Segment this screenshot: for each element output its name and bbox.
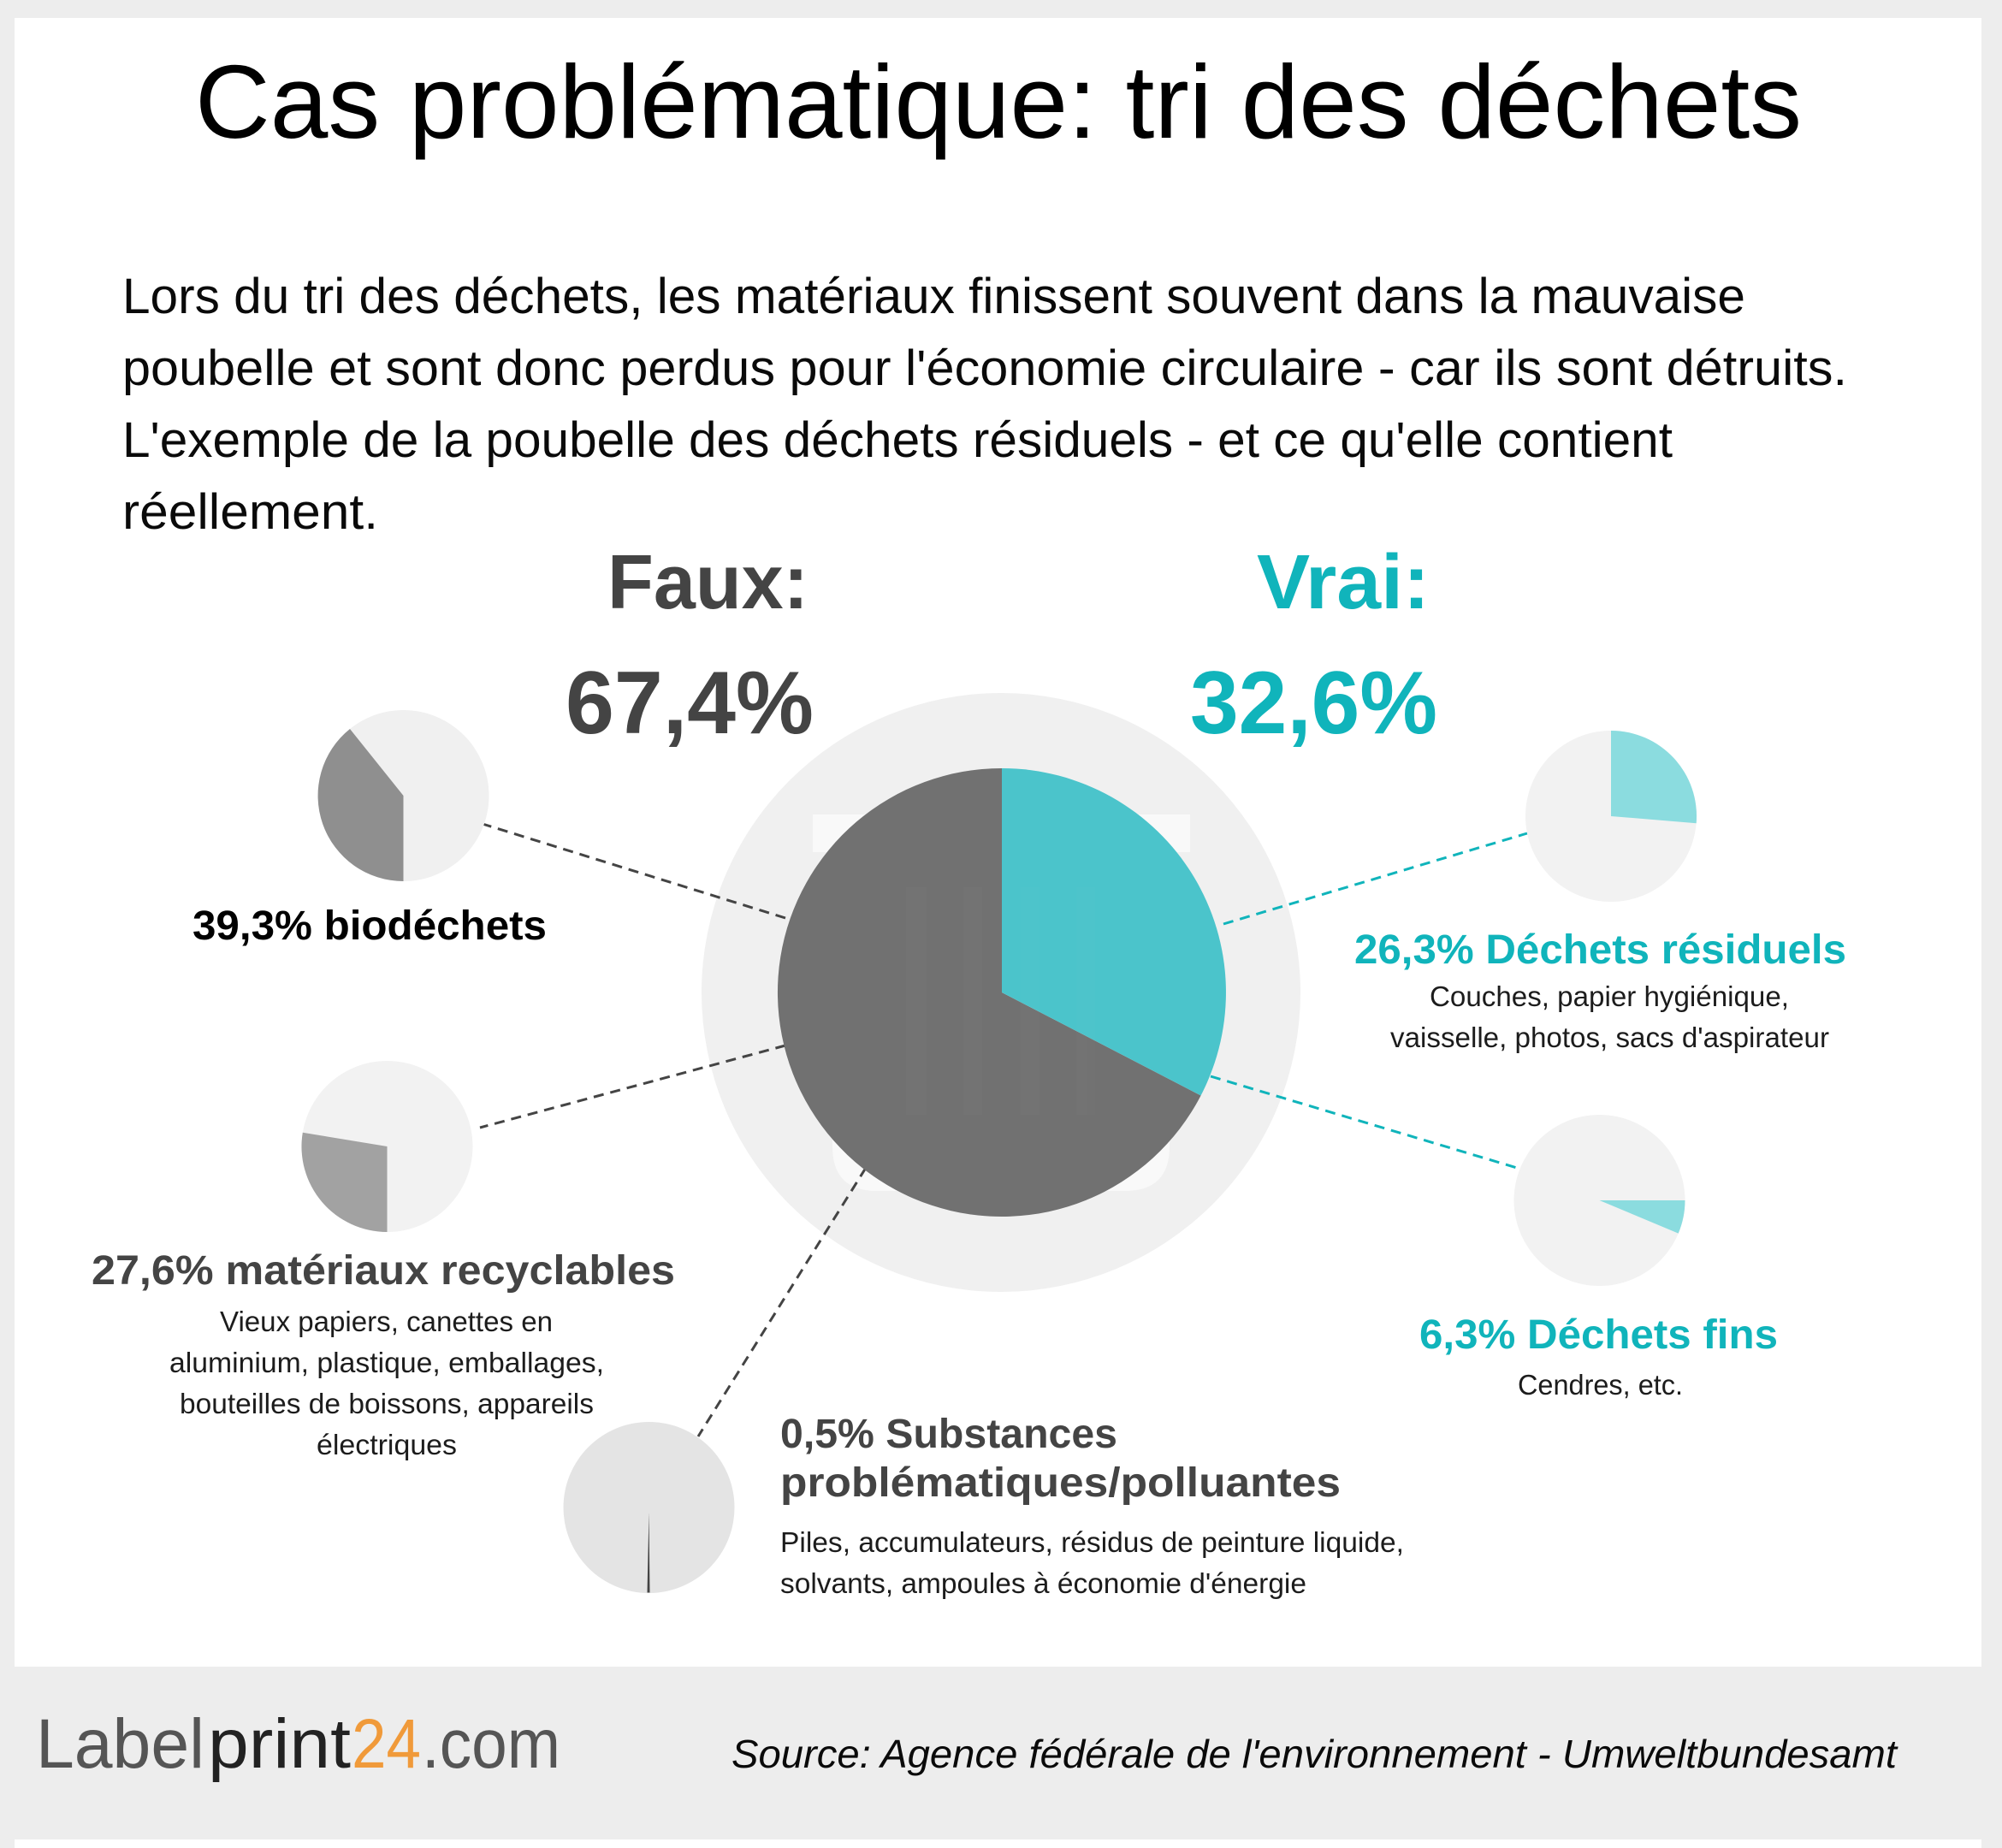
heading: Vrai: Vrai: [1257, 540, 1430, 625]
text: matériaux recyclables details: aluminium, plastique, emballages, [169, 1347, 604, 1378]
label: substances problématiques [780, 1412, 1341, 1506]
text: déchets résiduels details [1390, 980, 1829, 1053]
pie: déchets fins [1514, 1115, 1685, 1286]
figure: 32,6%: 32,6% [1190, 654, 1437, 753]
label: déchets résiduels: 26,3% Déchets résiduels [1354, 927, 1846, 973]
chart: central waste bin pie with halo [480, 693, 1527, 1436]
text: matériaux recyclables details: électriques [317, 1429, 457, 1460]
text: matériaux recyclables details: Vieux papiers, canettes en [220, 1306, 553, 1337]
label: substances problématiques: 0,5% Substances [780, 1412, 1117, 1457]
intro text block: Lors du tri des déchets, les matériaux finissent souvent dans la mauvaise [122, 269, 1745, 324]
label: matériaux recyclables: 27,6% matériaux recyclables [92, 1248, 675, 1294]
text: déchets résiduels details: Couches, papier hygiénique, [1430, 980, 1789, 1012]
pie slice: faux 67.4% [778, 768, 1201, 1217]
label: biodéchets: 39,3% biodéchets [192, 903, 547, 949]
logo: Labelprint24.com: .com [422, 1705, 560, 1783]
label: déchets fins: 6,3% Déchets fins [1419, 1312, 1778, 1358]
intro text block: L'exemple de la poubelle des déchets résiduels - et ce qu'elle contient [122, 412, 1673, 468]
panel: bottom white strip [15, 1839, 1981, 1848]
intro text block [122, 269, 1847, 540]
text: substances details: Piles, accumulateurs, résidus de peinture liquide, [780, 1526, 1404, 1558]
halo circle [702, 693, 1300, 1292]
text: matériaux recyclables details: bouteilles de boissons, appareils [180, 1388, 594, 1419]
logo: Labelprint24.com [36, 1705, 560, 1783]
label: substances problématiques: problématiques/polluantes [780, 1460, 1341, 1506]
heading: Faux: Faux: [607, 540, 808, 625]
text: matériaux recyclables details [169, 1306, 604, 1460]
intro text block: poubelle et sont donc perdus pour l'économie circulaire - car ils sont détruits. [122, 341, 1847, 396]
icon: trash bin behind the pie [813, 814, 1190, 1191]
text: déchets fins details: Cendres, etc. [1518, 1369, 1683, 1401]
title: Cas problématique: tri des déchets [195, 44, 1802, 160]
intro text block: réellement. [122, 484, 378, 540]
logo: Labelprint24.com: Label [36, 1705, 204, 1783]
logo: Labelprint24.com: 24 [352, 1705, 421, 1783]
text: substances details: solvants, ampoules à économie d'énergie [780, 1567, 1306, 1599]
logo: Labelprint24.com: print [208, 1705, 351, 1783]
pie: matériaux recyclables [301, 1061, 472, 1232]
leader lines [480, 824, 1527, 1436]
text: déchets résiduels details: vaisselle, photos, sacs d'aspirateur [1390, 1022, 1829, 1053]
pie: substances problématiques [563, 1422, 734, 1593]
text: substances details [780, 1526, 1404, 1599]
pie slice: vrai 32.6% [1002, 768, 1226, 1095]
source line: Source: Agence fédérale de l'environnement - Umweltbundesamt [732, 1732, 1898, 1776]
pie: biodéchets [318, 710, 489, 881]
figure: 67,4%: 67,4% [566, 654, 814, 753]
pie: déchets résiduels [1525, 731, 1697, 902]
faint bin columns in pie [906, 887, 1095, 1115]
